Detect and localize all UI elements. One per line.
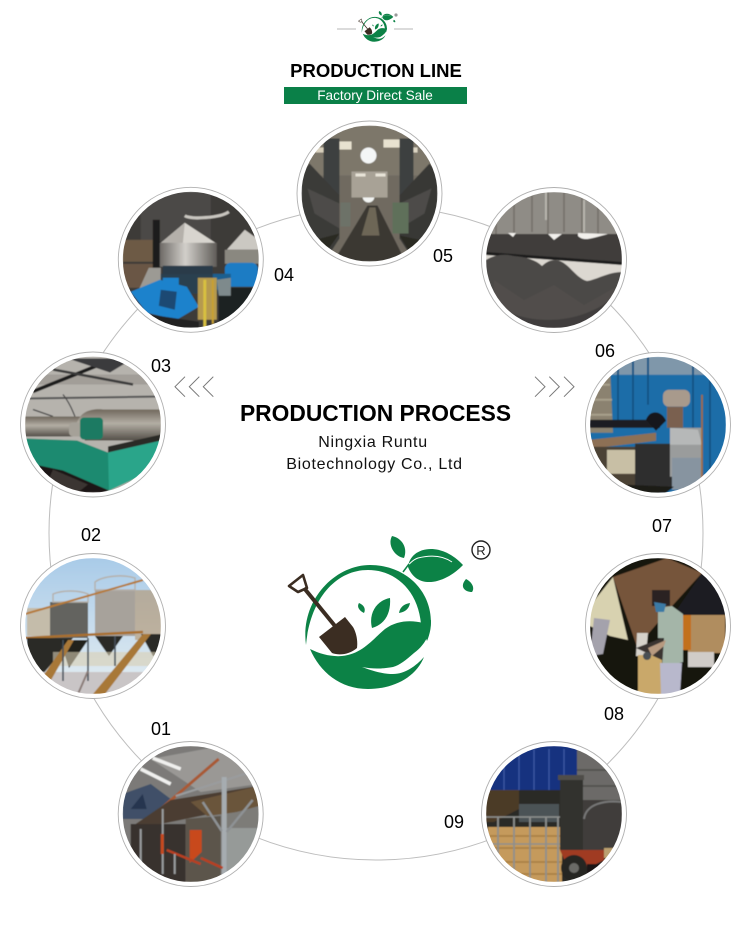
- step numbers: 03: [151, 356, 171, 376]
- banner: factory direct sale: [284, 87, 467, 104]
- connecting ring: [49, 206, 703, 860]
- title: production line: PRODUCTION LINE: [290, 60, 462, 81]
- step numbers: 07: [652, 516, 672, 536]
- step numbers: 09: [444, 812, 464, 832]
- photo 01: tanks under steel platform: [118, 742, 263, 886]
- step numbers: 05: [433, 246, 453, 266]
- banner: factory direct sale: Factory Direct Sale: [317, 88, 433, 103]
- company name: Ningxia Runtu: [318, 434, 428, 451]
- center logo: [289, 536, 490, 689]
- heading: production process: PRODUCTION PROCESS: [240, 400, 511, 426]
- arrows: right chevrons: [535, 377, 574, 397]
- photo 05: production hall: [297, 121, 442, 266]
- photo 06: coal on conveyor belts: [482, 188, 626, 332]
- photo 06 side: dryer with blue wall: [586, 352, 730, 497]
- step numbers: 06: [595, 341, 615, 361]
- company name: [286, 434, 463, 473]
- company name: Biotechnology Co., Ltd: [286, 456, 463, 473]
- arrows: left chevrons: [175, 377, 213, 397]
- photo 04: centrifuges and blue motors: [118, 187, 263, 332]
- photo 09: forklift with bags: [482, 742, 626, 886]
- photo 02: silos and stairs: [20, 554, 166, 698]
- step numbers: 08: [604, 704, 624, 724]
- step numbers: [81, 246, 672, 832]
- step numbers: 02: [81, 525, 101, 545]
- center logo: R: [476, 543, 486, 558]
- photo 07: worker bagging product: [586, 554, 730, 698]
- step numbers: 01: [151, 719, 171, 739]
- photo 03: rotary drum filter: [20, 352, 166, 497]
- step numbers: 04: [274, 265, 294, 285]
- small top logo: [337, 11, 413, 42]
